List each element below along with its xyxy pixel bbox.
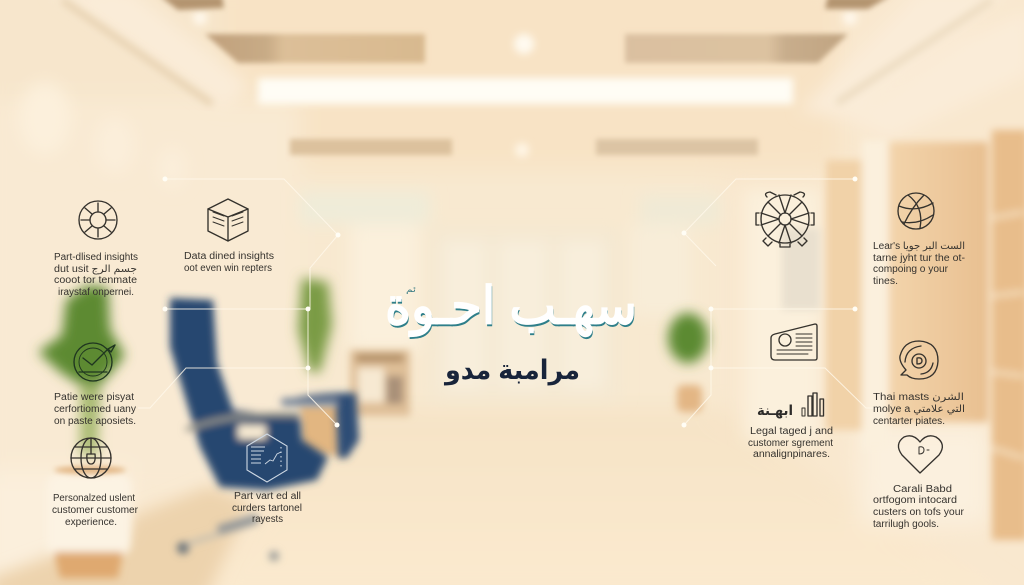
pot: [47, 474, 131, 556]
icon: bars: [802, 393, 824, 416]
text: part-dlised insights: iraystaf onpernei.: [58, 287, 134, 298]
item: chat bubble: [873, 341, 965, 427]
text: lear's: compoing o your: [873, 264, 949, 275]
icon: globe: [898, 193, 934, 229]
item: id card: [748, 324, 833, 460]
heading: Arabic label: ابهـنة: [757, 402, 793, 419]
text: data dined insights: Data dined insights: [184, 251, 274, 262]
text: personalized: customer customer: [52, 505, 139, 516]
text: legal: annalignpinares.: [753, 449, 830, 460]
icon: open box: [208, 199, 248, 241]
icon: heart: [898, 436, 942, 473]
text: part-dlised insights: [54, 252, 138, 298]
text: data dined insights: oot even win repters: [184, 263, 272, 274]
title: Arabic heading: ئم: [406, 285, 416, 294]
text: catal: tarrilugh gools.: [873, 519, 939, 530]
text: data dined insights: [184, 251, 274, 274]
plants: [38, 278, 708, 455]
icon: id card: [771, 324, 817, 360]
text: personalized: experience.: [65, 517, 117, 528]
text: thai: molye a التي علامتي: [873, 404, 965, 415]
item: ship wheel, top right: [756, 192, 814, 247]
text: part-dlised insights: Part-dlised insights: [54, 252, 138, 263]
item: globe with bulb: [52, 438, 139, 528]
text: part vart: Part vart ed all: [234, 491, 301, 502]
text: lear's: tines.: [873, 276, 898, 287]
text: catal: [873, 484, 965, 530]
text: part vart: curders tartonel: [232, 503, 302, 514]
text: legal: customer sgrement: [748, 438, 833, 449]
text: catal: custers on tofs your: [873, 507, 965, 518]
item: heart: [873, 436, 965, 530]
text: part vart: [232, 491, 302, 525]
text: patie were: cerfortiomed uany: [54, 404, 136, 415]
icon: globe: [71, 438, 111, 478]
item: sun insight, top left: [54, 201, 138, 298]
text: personalized: Personalzed uslent: [53, 493, 135, 504]
text: part-dlised insights: cooot tor tenmate: [54, 275, 137, 286]
text: catal: ortfogom intocard: [873, 495, 957, 506]
connector lines: right: [682, 176, 880, 428]
item: globe, far right: [873, 193, 965, 287]
item: hexagon chart on chair: [232, 434, 302, 525]
icon: chat bubble: [900, 341, 938, 379]
text: patie were: Patie were pisyat: [54, 392, 134, 403]
item: data driven insights: [184, 199, 274, 274]
text: thai: Thai masts الشرن: [873, 392, 964, 403]
connector lines: left: [138, 176, 340, 428]
text: patie were: [54, 392, 136, 427]
item: gauge, left middle: [54, 343, 136, 427]
text: lear's: [873, 241, 965, 287]
title: Arabic heading: سهـب احـوة: [385, 278, 637, 336]
text: part-dlised insights: dut usit جسم الرج: [54, 264, 137, 275]
text: personalized: [52, 493, 139, 528]
navy chair: [170, 298, 359, 561]
icon: ship wheel: [756, 192, 814, 247]
icon: sun wheel: [79, 201, 117, 239]
text: thai: [873, 392, 965, 427]
text: thai: centarter piates.: [873, 416, 945, 427]
text: legal: Legal taged j and: [750, 426, 833, 437]
subtitle: مرامبة مدو: [443, 355, 580, 386]
icon: gauge with check: [74, 343, 115, 381]
text: part vart: rayests: [252, 514, 283, 525]
icon: hexagon chart: [247, 434, 287, 482]
title: Arabic heading: سهـب احـوة: [386, 280, 638, 339]
text: lear's: Lear's الست البر جويا: [873, 241, 965, 252]
text: legal: [748, 426, 833, 460]
text: patie were: on paste aposiets.: [54, 416, 136, 427]
text: lear's: tarne jyht tur the ot-: [873, 253, 965, 264]
text: catal: Carali Babd: [893, 484, 952, 495]
